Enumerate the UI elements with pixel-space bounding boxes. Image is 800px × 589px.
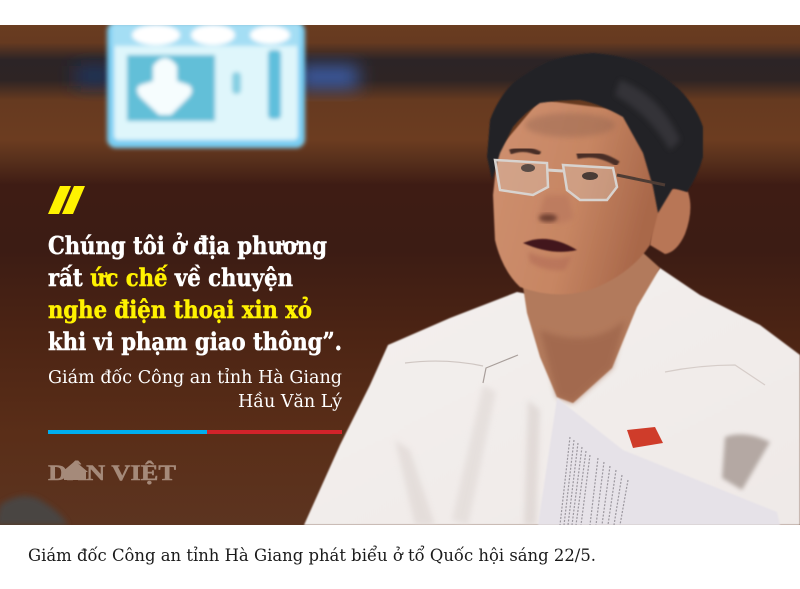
blurred exit sign (107, 22, 305, 148)
quote text: Chúng tôi ở địa phương (48, 231, 327, 260)
quote text (48, 231, 342, 356)
printed lines on paper (560, 437, 628, 525)
blurred head at bottom left (0, 496, 68, 525)
brows (510, 149, 540, 154)
quote text: nghe điện thoại xin xỏ (48, 295, 312, 324)
divider bar (48, 430, 342, 434)
attribution: Giám đốc Công an tỉnh Hà Giang (48, 368, 342, 388)
flag pin (627, 427, 663, 448)
glasses (495, 160, 617, 200)
quote text: rất ức chế về chuyện (48, 263, 293, 292)
caption: Giám đốc Công an tỉnh Hà Giang phát biểu ở tổ Quốc hội sáng 22/5. (28, 546, 596, 566)
neck (522, 250, 660, 403)
attribution: Hầu Văn Lý (238, 392, 342, 412)
attribution (48, 368, 342, 412)
shirt shadows (397, 444, 433, 525)
quote text: khi vi phạm giao thông”. (48, 327, 342, 356)
face (493, 100, 660, 294)
speaker figure (304, 53, 800, 525)
eyes (521, 164, 535, 172)
hair (487, 53, 703, 213)
blue glow beside sign (75, 66, 358, 88)
logo: Dan Viet: DÂN VIỆT (48, 460, 176, 485)
mouth (523, 239, 577, 252)
ear (650, 189, 690, 254)
quote mark (48, 186, 85, 214)
nose (541, 192, 570, 220)
paper (538, 398, 780, 525)
shirt and shoulders (304, 268, 800, 525)
